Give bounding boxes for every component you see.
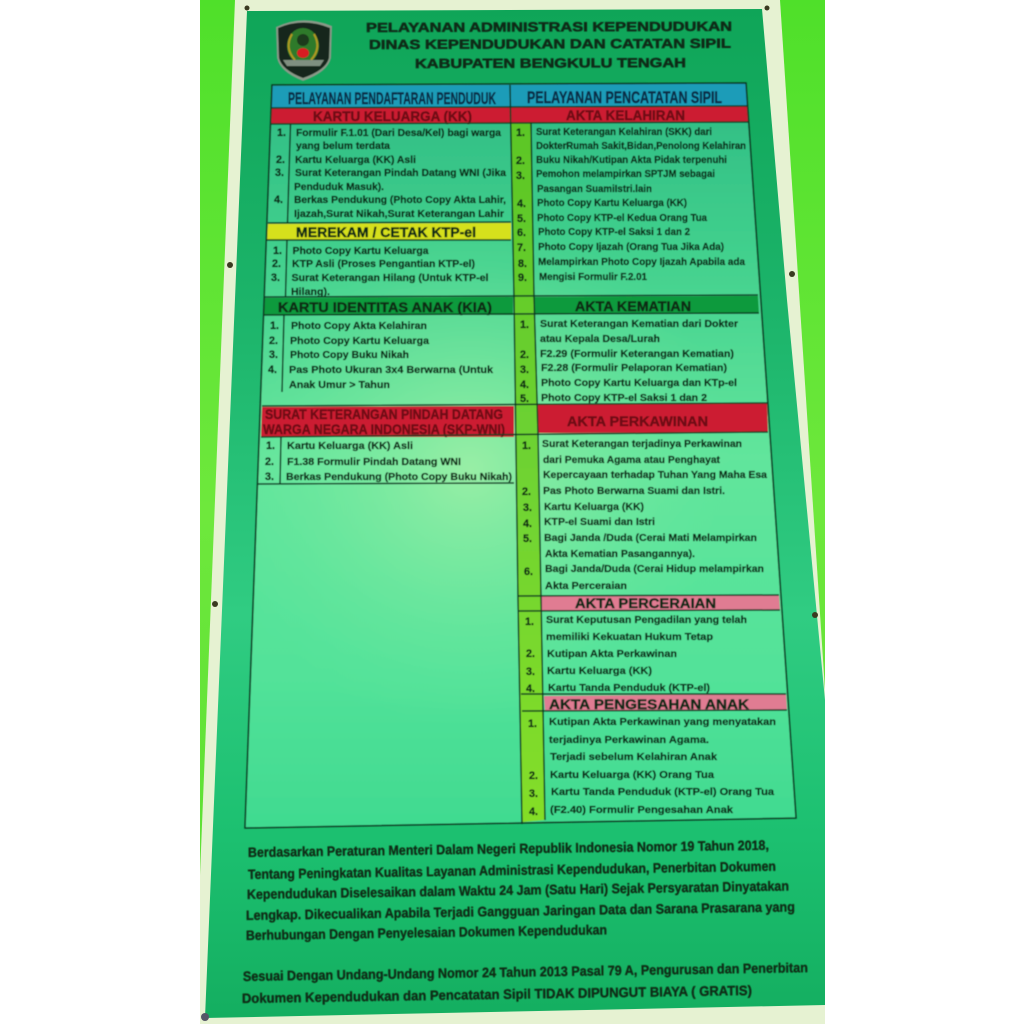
list: terjadinya Perkawinan Agama. xyxy=(549,735,709,746)
list xyxy=(549,717,776,816)
numbers: 1. xyxy=(270,320,279,332)
numbers: 2. xyxy=(272,258,281,270)
numbers: 2. xyxy=(516,155,525,167)
list: Kartu Keluarga (KK) Asli xyxy=(287,441,413,452)
list: Kartu Keluarga (KK) xyxy=(547,666,652,677)
numbers xyxy=(274,127,286,206)
list: Akta Kematian Pasangannya). xyxy=(545,549,695,560)
regulation paragraph: Tentang Peningkatan Kualitas Layanan Administrasi Kependudukan, Penerbitan Dokumen xyxy=(248,859,776,882)
list xyxy=(289,321,494,391)
heading bar: SURAT KETERANGAN PINDAH DATANG xyxy=(265,407,503,422)
panel: pelayanan pendaftaran penduduk header xyxy=(271,85,510,108)
banner white border xyxy=(200,0,825,1024)
title: DINAS KEPENDUDUKAN DAN CATATAN SIPIL xyxy=(369,36,731,52)
list: Photo Copy Kartu Keluarga (KK) xyxy=(537,198,687,209)
section: akta perceraian xyxy=(525,595,780,695)
list: memiliki Kekuatan Hukum Tetap xyxy=(546,632,713,643)
heading bar xyxy=(510,106,748,123)
list: F1.38 Formulir Pindah Datang WNI xyxy=(287,457,461,468)
list: Pasangan SuamiIstri.lain xyxy=(537,184,652,195)
regulation paragraph: Berdasarkan Peraturan Menteri Dalam Negeri Republik Indonesia Nomor 19 Tahun 2018, xyxy=(248,838,769,860)
list xyxy=(536,127,746,283)
numbers xyxy=(516,127,527,284)
heading bar xyxy=(261,406,514,437)
list: atau Kepala Desa/Lurah xyxy=(540,334,660,345)
heading bar: KARTU KELUARGA (KK) xyxy=(313,109,472,124)
numbers: 3. xyxy=(529,788,538,800)
list: Bagi Janda/Duda (Cerai Hidup melampirkan xyxy=(545,564,764,575)
regulation paragraph: Lengkap. Dikecualikan Apabila Terjadi Gangguan Jaringan Data dan Sarana Prasarana yang xyxy=(246,899,795,923)
heading bar: AKTA PENGESAHAN ANAK xyxy=(549,697,749,712)
title: KABUPATEN BENGKULU TENGAH xyxy=(415,55,686,71)
list: Pemohon melampirkan SPTJM sebagai xyxy=(536,169,715,180)
numbers: 8. xyxy=(518,258,527,270)
list: Kutipan Akta Perkawinan yang menyatakan xyxy=(549,717,776,728)
numbers: 4. xyxy=(517,198,526,210)
list xyxy=(542,439,768,592)
panel: service table xyxy=(245,83,796,828)
list: Kartu Tanda Penduduk (KTP-el) Orang Tua xyxy=(551,787,775,798)
numbers: 4. xyxy=(520,379,529,391)
list: Kartu Tanda Penduduk (KTP-el) xyxy=(548,683,710,694)
panel: pelayanan pencatatan sipil header xyxy=(510,83,747,107)
numbers: 2. xyxy=(265,456,274,468)
list: Photo Copy Akta Kelahiran xyxy=(291,321,427,332)
section: surat keterangan pindah datang xyxy=(261,406,514,483)
numbers: 9. xyxy=(518,272,527,284)
list: F2.28 (Formulir Pelaporan Kematian) xyxy=(541,363,727,374)
numbers: 2. xyxy=(269,335,278,347)
list: Surat Keterangan Kematian dari Dokter xyxy=(540,319,738,330)
regulation paragraph: Berhubungan Dengan Penyelesaian Dokumen Kependudukan xyxy=(246,922,607,943)
list xyxy=(294,128,507,220)
section: merekam cetak ktp-el xyxy=(267,223,511,298)
list: Kartu Keluarga (KK) Asli xyxy=(295,155,416,166)
regulation paragraph: Kependudukan Diselesaikan dalam Waktu 24 Jam (Satu Hari) Sejak Persyaratan Dinyatakan xyxy=(247,878,789,902)
numbers: 4. xyxy=(523,518,532,530)
list: Surat Keterangan Kelahiran (SKK) dari xyxy=(536,127,712,138)
numbers xyxy=(525,616,535,695)
heading bar xyxy=(270,107,510,124)
list: Bagi Janda /Duda (Cerai Mati Melampirkan xyxy=(544,533,757,544)
numbers: 3. xyxy=(265,471,274,483)
numbers: 4. xyxy=(274,194,283,206)
list: Photo Copy Kartu Keluarga xyxy=(290,336,430,347)
heading bar: AKTA PERCERAIAN xyxy=(575,596,716,611)
lime number column, right side xyxy=(511,122,545,822)
emblem: Bengkulu Tengah crest xyxy=(276,20,332,81)
list: Melampirkan Photo Copy Ijazah Apabila ada xyxy=(538,257,746,268)
heading bar xyxy=(537,403,768,433)
list: dari Pemuka Agama atau Penghayat xyxy=(543,455,721,466)
numbers: 4. xyxy=(529,806,538,818)
numbers: 5. xyxy=(517,213,526,225)
numbers: 1. xyxy=(525,616,534,628)
numbers: 2. xyxy=(529,770,538,782)
list: Kepercayaan terhadap Tuhan Yang Maha Esa xyxy=(543,470,768,481)
numbers: 1. xyxy=(516,127,525,139)
section: akta kelahiran xyxy=(510,106,748,284)
list: Penduduk Masuk). xyxy=(294,182,384,193)
list: Buku Nikah/Kutipan Akta Pidak terpenuhi xyxy=(536,155,727,166)
heading bar: AKTA KELAHIRAN xyxy=(566,108,685,123)
list: Photo Copy KTP-el Kedua Orang Tua xyxy=(537,213,708,224)
heading bar xyxy=(544,694,787,712)
numbers: 2. xyxy=(276,154,285,166)
table body background xyxy=(245,83,796,828)
numbers: 2. xyxy=(522,486,531,498)
heading bar: AKTA PERKAWINAN xyxy=(567,414,708,429)
list: Kutipan Akta Perkawinan xyxy=(547,649,677,660)
list: Mengisi Formulir F.2.01 xyxy=(539,272,648,283)
numbers: 1. xyxy=(528,718,537,730)
heading bar xyxy=(264,297,513,315)
numbers xyxy=(265,440,275,483)
list: Kartu Keluarga (KK) xyxy=(544,502,644,513)
list: Anak Umur > Tahun xyxy=(289,380,390,391)
list: Surat Keterangan Pindah Datang WNI (Jika xyxy=(295,168,507,179)
numbers: 5. xyxy=(523,533,532,545)
numbers: 3. xyxy=(526,666,535,678)
numbers: 1. xyxy=(522,440,531,452)
numbers xyxy=(268,320,279,376)
list: KTP Asli (Proses Pengantian KTP-el) xyxy=(292,259,475,270)
numbers: 1. xyxy=(520,319,529,331)
numbers: 3. xyxy=(523,502,532,514)
numbers xyxy=(522,440,533,578)
list: Ijazah,Surat Nikah,Surat Keterangan Lahir xyxy=(294,209,504,220)
numbers: 3. xyxy=(269,349,278,361)
section: akta kematian xyxy=(520,296,759,405)
list xyxy=(546,615,747,694)
numbers: 1. xyxy=(273,245,282,257)
list: Terjadi sebelum Kelahiran Anak xyxy=(550,752,718,763)
free of charge notice xyxy=(242,960,808,1006)
section: akta perkawinan xyxy=(522,403,768,592)
numbers: 4. xyxy=(268,364,277,376)
heading bar xyxy=(267,223,511,240)
numbers: 3. xyxy=(516,170,525,182)
numbers: 1. xyxy=(266,440,275,452)
regulation paragraph xyxy=(246,838,795,943)
heading bar: MEREKAM / CETAK KTP-el xyxy=(296,225,476,240)
list xyxy=(291,246,489,298)
list: Photo Copy Kartu Keluarga dan KTp-el xyxy=(541,378,737,389)
list xyxy=(286,441,512,483)
table grid lines xyxy=(245,83,796,828)
numbers xyxy=(520,319,529,405)
numbers: 3. xyxy=(271,272,280,284)
list: DokterRumah Sakit,Bidan,Penolong Kelahiran xyxy=(536,141,746,152)
heading bar: KARTU IDENTITAS ANAK (KIA) xyxy=(278,300,492,315)
list: (F2.40) Formulir Pengesahan Anak xyxy=(550,805,734,816)
section: kartu identitas anak xyxy=(264,297,513,391)
list: yang belum terdata xyxy=(296,141,391,152)
list: Formulir F.1.01 (Dari Desa/Kel) bagi warga xyxy=(296,128,502,139)
free of charge notice: Sesuai Dengan Undang-Undang Nomor 24 Tahun 2013 Pasal 79 A, Pengurusan dan Penerbitan xyxy=(243,960,808,984)
heading bar: AKTA KEMATIAN xyxy=(575,299,691,314)
list: Surat Keputusan Pengadilan yang telah xyxy=(546,615,747,626)
heading bar: WARGA NEGARA INDONESIA (SKP-WNI) xyxy=(263,422,505,437)
list: Kartu Keluarga (KK) Orang Tua xyxy=(550,770,715,781)
list: Photo Copy KTP-el Saksi 1 dan 2 xyxy=(538,227,691,238)
numbers: 5. xyxy=(520,393,529,405)
heading bar xyxy=(534,296,759,314)
list: Photo Copy Kartu Keluarga xyxy=(292,246,429,257)
list: F2.29 (Formulir Keterangan Kematian) xyxy=(540,349,734,360)
numbers: 3. xyxy=(275,167,284,179)
numbers: 4. xyxy=(526,683,535,695)
numbers xyxy=(528,718,538,818)
numbers: 7. xyxy=(517,242,526,254)
numbers: 6. xyxy=(524,566,533,578)
numbers: 6. xyxy=(517,227,526,239)
list: Berkas Pendukung (Photo Copy Buku Nikah) xyxy=(286,472,512,483)
list: Pas Photo Berwarna Suami dan Istri. xyxy=(543,486,725,497)
panel: pelayanan pencatatan sipil header: PELAYANAN PENCATATAN SIPIL xyxy=(527,89,722,107)
banner green surface xyxy=(205,9,825,1018)
numbers: 2. xyxy=(526,648,535,660)
list xyxy=(540,319,738,404)
list: Photo Copy KTP-el Saksi 1 dan 2 xyxy=(541,393,708,404)
title: PELAYANAN ADMINISTRASI KEPENDUDUKAN xyxy=(366,19,732,35)
list: Surat Keterangan Hilang (Untuk KTP-el xyxy=(292,273,489,284)
heading bar xyxy=(541,595,780,611)
panel: pelayanan pendaftaran penduduk header: PELAYANAN PENDAFTARAN PENDUDUK xyxy=(288,90,496,108)
list: Akta Perceraian xyxy=(545,581,627,592)
list: Pas Photo Ukuran 3x4 Berwarna (Untuk xyxy=(289,365,494,376)
numbers xyxy=(271,245,282,284)
nails xyxy=(201,6,818,1021)
list: Photo Copy Ijazah (Orang Tua Jika Ada) xyxy=(538,242,724,253)
wall background xyxy=(200,0,825,1024)
title xyxy=(366,19,732,71)
numbers: 1. xyxy=(277,127,286,139)
numbers: 3. xyxy=(520,364,529,376)
list: KTP-el Suami dan Istri xyxy=(544,517,655,528)
list: Hilang). xyxy=(291,287,330,298)
free of charge notice: Dokumen Kependudukan dan Pencatatan Sipil TIDAK DIPUNGUT BIAYA ( GRATIS) xyxy=(242,983,752,1006)
numbers: 2. xyxy=(520,349,529,361)
list: Photo Copy Buku Nikah xyxy=(290,350,409,361)
section: kartu keluarga xyxy=(270,107,510,220)
section: akta pengesahan anak xyxy=(528,694,787,818)
list: Surat Keterangan terjadinya Perkawinan xyxy=(542,439,742,450)
list: Berkas Pendukung (Photo Copy Akta Lahir, xyxy=(294,195,506,206)
